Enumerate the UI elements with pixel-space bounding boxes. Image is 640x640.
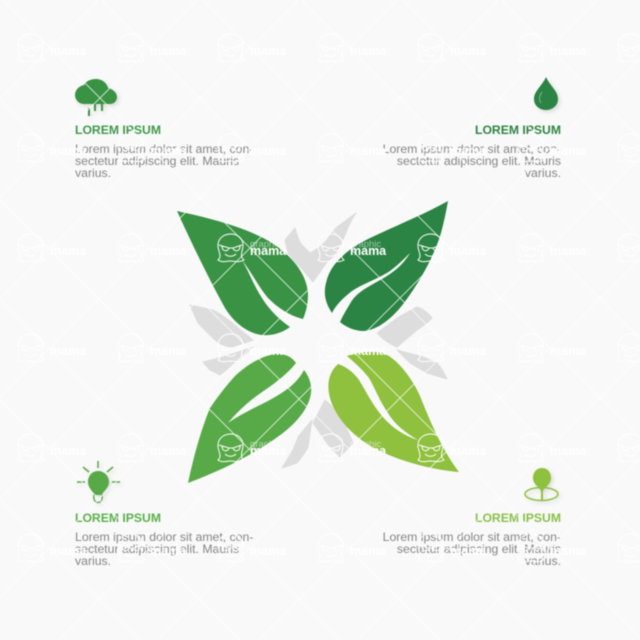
watermark wordmark: mama: mama — [450, 544, 487, 558]
watermark wordmark: mama: mama — [50, 444, 87, 458]
watermark wordmark: graphic: graphic — [450, 239, 481, 250]
text block: top left: LOREM IPSUM — [75, 123, 161, 137]
watermark wordmark: mama: mama — [150, 244, 187, 258]
watermark wordmark: graphic: graphic — [450, 439, 481, 450]
watermark wordmark: mama: mama — [150, 44, 187, 58]
watermark wordmark: mama: mama — [50, 244, 87, 258]
text block: bottom left — [74, 511, 254, 568]
watermark wordmark: mama: mama — [150, 544, 187, 558]
watermark wordmark: mama: mama — [550, 544, 587, 558]
watermark wordmark: mama: mama — [50, 44, 87, 58]
text block: top left — [74, 123, 253, 180]
watermark wordmark: mama: mama — [150, 444, 187, 458]
watermark wordmark: mama: mama — [350, 544, 387, 558]
text block: top left: Lorem ipsum dolor sit amet, con- — [75, 142, 253, 156]
grey background leaves — [190, 213, 447, 468]
watermark wordmark: mama: mama — [450, 244, 487, 258]
watermark wordmark: mama: mama — [50, 144, 87, 158]
text block: bottom left: sectetur adipiscing elit. Mauris — [75, 542, 239, 556]
text block: top right: varius. — [525, 166, 561, 180]
leaf: top right — [325, 201, 448, 331]
watermark wordmark: mama: mama — [350, 344, 387, 358]
watermark wordmark: graphic: graphic — [350, 439, 381, 450]
watermark wordmark: mama: mama — [350, 144, 387, 158]
text block: top right — [383, 123, 562, 180]
watermark wordmark: mama: mama — [150, 344, 187, 358]
watermark wordmark: mama: mama — [50, 544, 87, 558]
watermark wordmark: mama: mama — [450, 144, 487, 158]
text block: top left: sectetur adipiscing elit. Mauris — [75, 154, 239, 168]
watermark wordmark: mama: mama — [250, 144, 287, 158]
text block: bottom left: varius. — [75, 554, 111, 568]
watermark wordmark: mama — [50, 44, 587, 558]
watermark wordmark: mama: mama — [450, 44, 487, 58]
watermark wordmark: mama: mama — [350, 444, 387, 458]
leaf: bottom right — [328, 352, 459, 472]
watermark wordmark: mama: mama — [150, 144, 187, 158]
text block: bottom left: LOREM IPSUM — [75, 511, 161, 525]
text block: bottom left: Lorem ipsum dolor sit amet, con- — [75, 530, 253, 544]
watermark wordmark: mama: mama — [550, 144, 587, 158]
text block: top left: varius. — [75, 166, 111, 180]
watermark wordmark: mama: mama — [550, 344, 587, 358]
text block: top right: LOREM IPSUM — [475, 123, 561, 137]
text block: bottom right: sectetur adipiscing elit. Mauris — [397, 542, 561, 556]
watermark wordmark: mama: mama — [550, 44, 587, 58]
text block: bottom right: Lorem ipsum dolor sit amet, con- — [383, 530, 561, 544]
watermark wordmark: mama: mama — [250, 344, 287, 358]
text block: bottom right — [383, 511, 561, 568]
watermark wordmark: graphic: graphic — [250, 239, 281, 250]
watermark wordmark: mama: mama — [250, 244, 287, 258]
watermark wordmark: mama: mama — [550, 244, 587, 258]
leaf: bottom left — [188, 354, 311, 483]
watermark wordmark: mama: mama — [350, 44, 387, 58]
watermark wordmark: mama: mama — [350, 244, 387, 258]
watermark wordmark: mama: mama — [250, 44, 287, 58]
watermark wordmark: mama: mama — [550, 444, 587, 458]
watermark wordmark: mama: mama — [250, 544, 287, 558]
watermark wordmark: graphic — [250, 239, 481, 450]
text block: bottom right: LOREM IPSUM — [475, 511, 561, 525]
watermark wordmark: mama: mama — [250, 444, 287, 458]
text block: bottom right: varius. — [525, 554, 561, 568]
watermark wordmark: mama: mama — [50, 344, 87, 358]
leaf: top left — [177, 211, 308, 335]
text block: top right: sectetur adipiscing elit. Mauris — [397, 154, 561, 168]
watermark wordmark: graphic: graphic — [250, 439, 281, 450]
text block: top right: Lorem ipsum dolor sit amet, con- — [383, 142, 561, 156]
watermark wordmark: mama: mama — [450, 444, 487, 458]
watermark wordmark: mama: mama — [450, 344, 487, 358]
watermark wordmark: graphic: graphic — [350, 239, 381, 250]
